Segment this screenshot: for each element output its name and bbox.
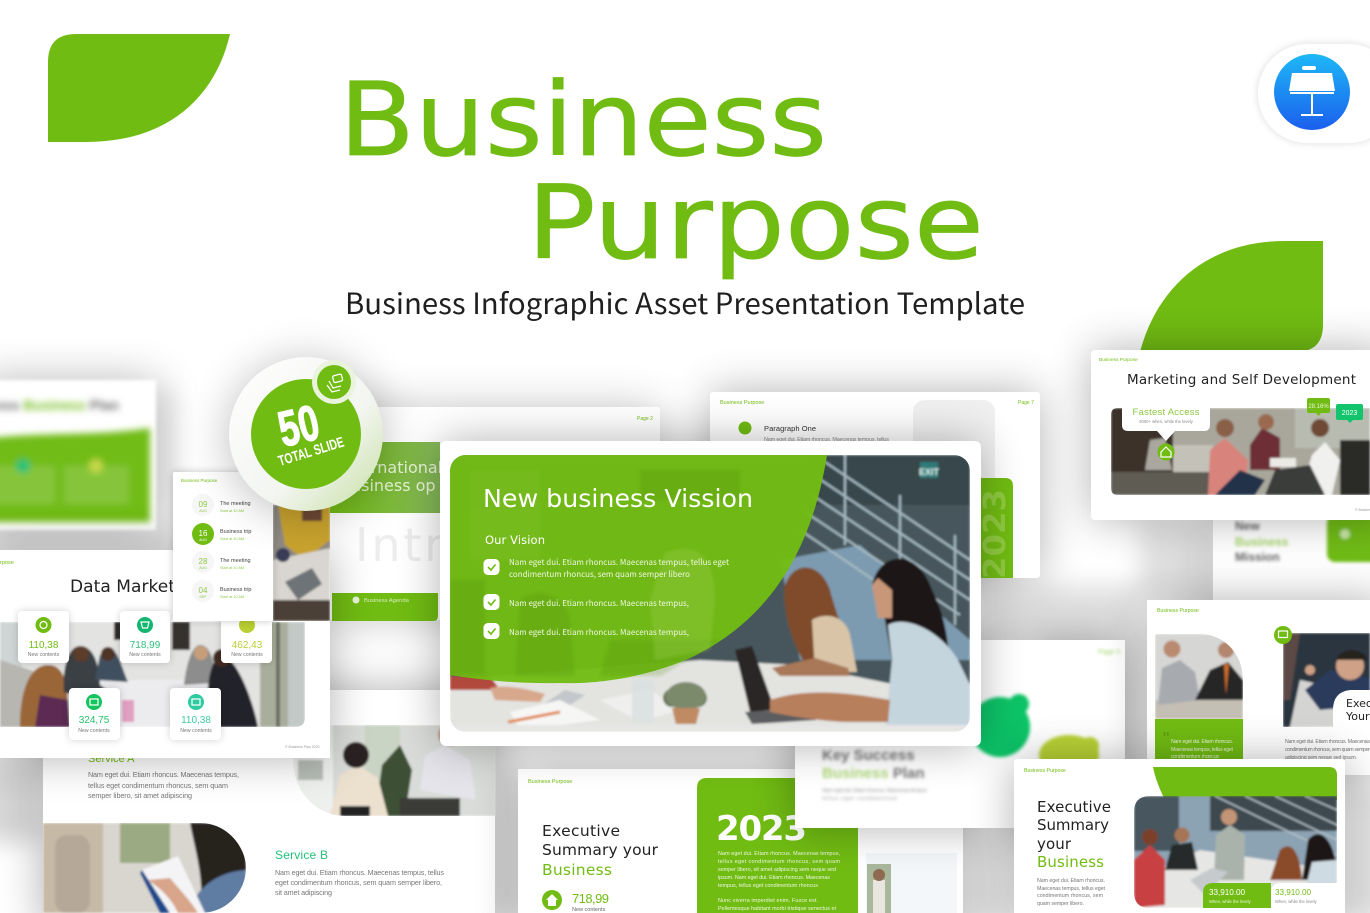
service a heading: Service A — [88, 753, 135, 765]
decorative leaf: top left — [48, 34, 230, 142]
badge: 50 total slide — [228, 357, 384, 516]
check item 1 — [484, 556, 729, 580]
green year panel: Pellentesque habitant morbi tristique senectus et — [718, 906, 836, 912]
green quote block: Nam eget dui. Etiam rhoncus. — [1171, 739, 1233, 745]
backdrop shadows — [0, 390, 1370, 913]
tile: 324,75: New contents — [78, 728, 110, 734]
page number: Page 7 — [1018, 400, 1034, 406]
green year panel: Nam eget dui. Etiam rhoncus. Maecenas tempus, — [718, 851, 840, 857]
green top shape — [1153, 767, 1337, 800]
tile: 110,38 — [18, 611, 69, 663]
paragraph heading: Paragraph One — [764, 424, 816, 433]
badge: 50 total slide: TOTAL SLIDE — [276, 435, 346, 470]
stat: 718,99: New contents — [572, 907, 606, 913]
stat tile white: 33,910.00 — [1275, 888, 1311, 897]
tile: 110,38 teal — [170, 688, 221, 740]
panel: blurred key success slide: Key Success — [822, 747, 915, 764]
green year panel: tempus, tellus eget condimentum rhoncus — [718, 883, 818, 889]
tag: percent: 28.16% — [1308, 404, 1329, 410]
paragraph bullet — [738, 422, 752, 434]
green banner: International — [340, 458, 442, 477]
body text — [1037, 878, 1106, 907]
executive photo — [1283, 633, 1370, 727]
paragraph text: Nam eget dui. Etiam rhoncus. Maecenas tempus, tellus — [764, 437, 889, 443]
tile: 324,75 — [69, 688, 120, 740]
agenda item 09: The meeting — [220, 501, 251, 507]
stat: 718,99: 718,99 — [572, 891, 609, 906]
tag: year — [1336, 404, 1363, 423]
green quote block — [1155, 719, 1243, 764]
white intro block — [330, 513, 440, 593]
panel: paragraph slide page 7 — [710, 392, 1040, 579]
slide label: Business Purpose — [528, 779, 572, 785]
green year panel: tellus eget condimentum rhoncus, sem quam — [718, 859, 840, 865]
green year panel — [697, 778, 858, 913]
team meeting photo — [0, 622, 305, 727]
slide heading: Business — [1037, 853, 1104, 871]
body text: quam semper libero. — [1037, 901, 1084, 907]
white heading bubble: Your — [1345, 710, 1370, 723]
agenda item 09: AUG — [199, 509, 207, 513]
tile: 110,38: 110,38 — [29, 640, 59, 651]
tag: year: 2023 — [1342, 410, 1357, 417]
tile: 718,99 — [120, 611, 170, 663]
service a text: Nam eget dui. Etiam rhoncus. Maecenas tempus, — [88, 770, 239, 779]
agenda item 16: 16 — [199, 529, 208, 538]
subtitle: Business Infographic Asset Presentation Template — [345, 281, 1025, 323]
green quote block: Maecenas tempus, tellus eget — [1171, 747, 1234, 753]
badge: 50 total slide: 50 — [273, 396, 325, 458]
body text: condimentum rhoncus, sem quam semper — [1285, 747, 1370, 753]
panel: blurred business plan slide — [0, 380, 156, 530]
green year panel: ipsum. Nam eget dui. Etiam rhoncus. Maecenas — [718, 875, 830, 881]
slide heading: Business — [542, 861, 612, 879]
check item 1: Nam eget dui. Etiam rhoncus. Maecenas tempus, tellus eget — [509, 556, 729, 568]
panel: executive summary 2023 slide — [518, 769, 963, 913]
team photo — [1134, 796, 1337, 908]
tile: 462,43: 462,43 — [232, 640, 263, 651]
title: Purpose — [527, 164, 984, 283]
body text: Nam eget dui. Etiam rhoncus. Maecenas — [1285, 739, 1370, 745]
body text: condimentum rhoncus, sem — [1037, 893, 1104, 899]
agenda item 04: Start at 10 AM — [220, 595, 244, 599]
agenda item 28: 28 — [199, 557, 208, 566]
panel: blurred key success slide: Page 5 — [1098, 649, 1120, 656]
green banner: Business op — [340, 476, 436, 495]
panel: introduction slide page 2 — [330, 407, 660, 621]
slide footer: © Business Plan 2023 — [285, 745, 320, 749]
agenda item 16: Business trip — [220, 529, 252, 535]
agenda item 28 — [192, 551, 251, 573]
team photo with green overlay — [450, 455, 970, 732]
stat tile green: When, while the lovely — [1209, 899, 1252, 904]
title — [339, 61, 984, 283]
check item 1: condimentum rhoncus, sem quam semper libero — [509, 568, 690, 580]
slide heading: your — [1037, 835, 1072, 853]
office photo — [293, 724, 496, 816]
service b text: eget condimentum rhoncus, sem quam semper libero, — [275, 878, 442, 887]
slide heading: Summary — [1037, 816, 1109, 834]
agenda item 16: Start at 10 AM — [220, 537, 244, 541]
stat tile white — [1271, 883, 1337, 908]
icon: slides — [312, 360, 356, 404]
stat tile green — [1203, 883, 1271, 908]
page number: Page 2 — [637, 416, 653, 422]
panel: service slide — [43, 690, 496, 913]
grey image placeholder — [913, 400, 995, 490]
green banner — [330, 442, 442, 513]
slide heading — [1037, 798, 1111, 871]
team photo with green overlay: EXIT — [919, 467, 939, 477]
check item 3: Nam eget dui. Etiam rhoncus. Maecenas tempus, — [509, 626, 689, 638]
tile: 110,38: New contents — [28, 652, 60, 658]
slide heading: Summary your — [542, 841, 659, 859]
panel: executive summary business slide — [1014, 759, 1345, 913]
agenda item 16: AUG — [199, 538, 207, 542]
service a text: semper libero, sit amet adipiscing — [88, 791, 192, 800]
panel: blurred new business mission slide: Mission — [1235, 550, 1280, 564]
check item 2 — [484, 594, 689, 610]
tile: 324,75: 324,75 — [79, 715, 110, 726]
sub heading: Our Vision — [485, 533, 545, 547]
tile: 110,38 teal: 110,38 — [181, 715, 211, 726]
green agenda bar: Business Agenda — [364, 598, 410, 604]
green year panel: semper libero, sit amet adipiscing sem neque sed — [718, 867, 836, 873]
green quote block: condimentum rhoncus — [1171, 754, 1219, 760]
service b heading: Service B — [275, 848, 328, 862]
panel: new business vision slide — [440, 441, 981, 746]
green year panel: 2023 — [716, 809, 807, 849]
agenda item 04: SEP — [199, 595, 207, 599]
agenda item 09: 09 — [199, 500, 208, 509]
slide heading: Marketing and Self Development — [1127, 372, 1356, 388]
service b text: Nam eget dui. Etiam rhoncus. Maecenas tempus, tellus — [275, 868, 444, 877]
agenda item 04: 04 — [199, 586, 208, 595]
panel: blurred new business mission slide: Business — [1235, 535, 1289, 549]
callout: fastest access: 3000+ when, while the lovely — [1139, 419, 1194, 424]
slide heading — [542, 822, 659, 879]
stat: 718,99 — [542, 890, 609, 913]
agenda item 04: Business trip — [220, 587, 252, 593]
check item 3 — [484, 623, 689, 639]
decorative leaf: right — [1140, 241, 1323, 352]
check item 2: Nam eget dui. Etiam rhoncus. Maecenas tempus, — [509, 597, 689, 609]
panel: marketing slide — [1091, 350, 1370, 520]
tile: 462,43 — [221, 611, 272, 663]
slide heading: New business Vission — [483, 484, 753, 513]
callout: fastest access: Fastest Access — [1132, 407, 1200, 418]
intro ghost word: Intro — [355, 518, 473, 572]
agenda item 28: The meeting — [220, 558, 251, 564]
service b text: sit amet adipiscing — [275, 888, 332, 897]
tile: 462,43: New contents — [231, 652, 263, 658]
slide label: Business Purpose — [1157, 608, 1199, 614]
green quote block: " — [1163, 729, 1169, 749]
agenda item 28: Start at 10 AM — [220, 566, 244, 570]
agenda item 04 — [192, 580, 252, 602]
slide heading: Executive — [1037, 798, 1111, 816]
cafe photo — [1111, 408, 1370, 495]
tile: 718,99: New contents — [129, 652, 161, 658]
tile: 718,99: 718,99 — [130, 640, 161, 651]
service a text: tellus eget condimentum rhoncus, sem quam — [88, 781, 228, 790]
keynote badge — [1258, 44, 1370, 143]
tag: percent — [1307, 398, 1330, 416]
agenda item 09 — [192, 494, 251, 516]
title: Business — [339, 61, 827, 180]
service a text — [88, 770, 239, 800]
panel: blurred new business mission slide: New — [1235, 519, 1260, 533]
panel: blurred key success slide: tellus eget condimentum — [822, 796, 897, 802]
panel: blurred key success slide: Business Plan — [822, 765, 925, 782]
slide label: Business Purpose — [181, 478, 218, 483]
pale photo frame — [866, 853, 957, 913]
checklist — [484, 556, 729, 639]
body text — [1285, 739, 1370, 761]
agenda item 28: AUG — [199, 566, 207, 570]
slide label: Business Purpose — [1099, 357, 1138, 363]
body text: adipiscing sem neque sed ipsum. — [1285, 755, 1357, 761]
slide label: Business Purpose — [720, 400, 764, 406]
panel: blurred key success slide: Nam eget dui. Etiam rhoncus. Maecenas tempus — [822, 788, 927, 794]
green year panel: 2023 — [978, 489, 1013, 579]
panel: blurred new business mission slide — [1213, 515, 1370, 635]
body text: Nam eget dui. Etiam rhoncus. — [1037, 878, 1105, 884]
stat tile white: When, while the lovely — [1275, 899, 1318, 904]
slide heading: Executive — [542, 822, 620, 840]
panel: blurred key success slide — [795, 640, 1125, 828]
callout: fastest access — [1122, 403, 1210, 441]
green year panel: Nunc viverra imperdiet enim. Fusce est. — [718, 898, 818, 904]
meeting photo — [273, 505, 330, 621]
agenda item 16 — [192, 523, 252, 545]
icon: house — [1158, 444, 1174, 460]
green agenda bar — [332, 593, 438, 621]
panel: quote and executive slide — [1147, 600, 1370, 775]
panel: agenda slide — [173, 472, 273, 621]
white heading bubble — [1333, 690, 1370, 727]
body text: Maecenas tempus, tellus eget — [1037, 886, 1106, 892]
icon: monitor — [1274, 626, 1292, 644]
handshake photo — [1155, 634, 1243, 719]
service b text — [275, 868, 444, 897]
slide heading: Data Market — [70, 577, 175, 597]
stat tile green: 33,910.00 — [1209, 888, 1245, 897]
tile: 110,38 teal: New contents — [180, 728, 212, 734]
clipboard photo — [43, 823, 246, 913]
panel: data market slide — [0, 550, 330, 758]
agenda item 09: Start at 10 AM — [220, 509, 244, 513]
slide label: Business Purpose — [1024, 768, 1066, 774]
